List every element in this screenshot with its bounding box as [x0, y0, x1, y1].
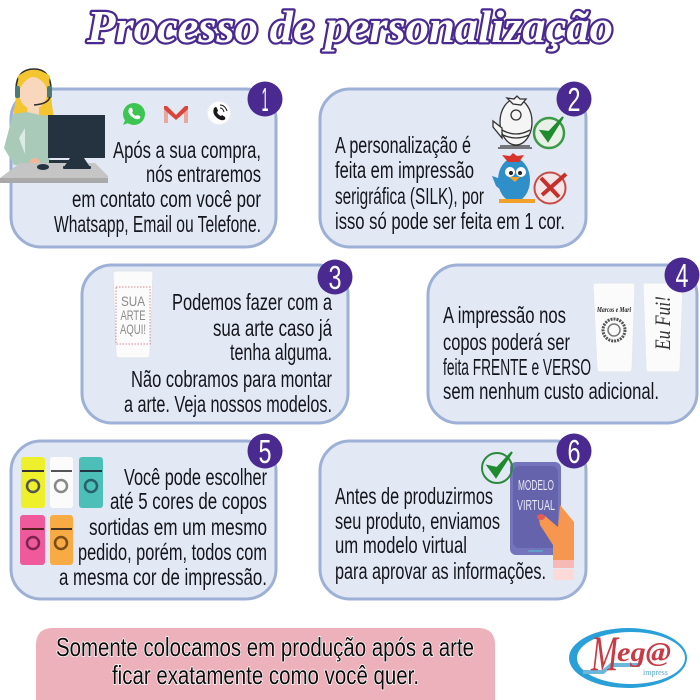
text: step 4: feita FRENTE e VERSO	[443, 354, 591, 380]
text: step 5: sortidas em um mesmo	[89, 514, 267, 540]
number badge 1	[248, 81, 282, 118]
icon: whatsapp	[123, 103, 145, 125]
icon: green check	[534, 117, 564, 148]
number badge 6: 6	[568, 433, 580, 470]
text: step 3: tenha alguma.	[230, 339, 332, 365]
text: step 5: Você pode escolher	[124, 464, 267, 490]
icon: hand	[537, 505, 574, 580]
number badge 1: 1	[262, 81, 268, 118]
panel: final note: Somente colocamos em produção após a arte	[56, 632, 474, 662]
text: step 5: até 5 cores de copos	[110, 488, 267, 514]
text: step 5	[59, 464, 267, 590]
image: cup back	[643, 283, 683, 372]
text: step 1: Whatsapp, Email ou Telefone.	[54, 211, 261, 237]
image: cup with art placeholder: AQUI!	[120, 321, 146, 337]
panel: step 2	[320, 81, 592, 247]
text: step 2: serigráfica (SILK), por	[335, 183, 484, 209]
text: step 1: nós entraremos	[146, 161, 261, 187]
text: step 1: em contato com você por	[72, 186, 261, 212]
panel: step 4	[428, 257, 700, 423]
logo: Mega Impress	[569, 625, 687, 688]
number badge 6	[556, 433, 592, 470]
image: cup with art placeholder: SUA	[121, 293, 146, 309]
logo: Mega Impress: M	[590, 625, 620, 681]
number badge 4	[664, 257, 700, 294]
text: step 3: a arte. Veja nossos modelos.	[124, 391, 332, 417]
icon: phone with virtual model: MODELO	[518, 477, 554, 494]
text: step 2: isso só pode ser feita em 1 cor.	[335, 208, 565, 234]
text: step 3: Não cobramos para montar	[131, 366, 332, 392]
text: step 4: A impressão nos	[443, 302, 566, 328]
number badge 3	[318, 259, 352, 296]
panel: final note	[36, 628, 495, 700]
text: step 2: feita em impressão	[335, 157, 474, 183]
text: step 2: A personalização é	[335, 132, 471, 158]
text: step 1: Após a sua compra,	[113, 137, 261, 163]
icon: outlined chick	[493, 96, 532, 148]
title: Processo de personalização	[86, 1, 613, 52]
text: step 6: Antes de produzirmos	[335, 483, 493, 509]
cup: white	[50, 457, 73, 508]
image: cup front: Marcos e Mari	[596, 306, 631, 314]
cup: teal	[79, 457, 103, 508]
number badge 2: 2	[568, 81, 580, 118]
number badge 2	[556, 81, 592, 118]
cup: yellow	[21, 457, 45, 508]
text: step 3: Podemos fazer com a	[172, 289, 332, 315]
text: step 5: pedido, porém, todos com	[78, 539, 267, 565]
panel: final note: ficar exatamente como você quer.	[112, 660, 419, 690]
icon: blue chick	[492, 153, 535, 203]
text: step 6: seu produto, enviamos	[335, 508, 500, 534]
icon: phone with virtual model	[510, 462, 561, 555]
text: step 4: copos poderá ser	[443, 329, 570, 355]
text: step 1	[54, 137, 261, 237]
logo: Mega Impress: impress	[643, 668, 668, 677]
icon: attendant at computer	[0, 69, 108, 183]
image: cup front	[593, 283, 635, 372]
cup: orange	[50, 515, 73, 565]
panel: step 5	[11, 433, 282, 599]
number badge 5	[248, 433, 282, 470]
number badge 4: 4	[676, 257, 688, 294]
panel: step 3	[82, 259, 352, 423]
image: cup with art placeholder	[113, 271, 153, 358]
text: step 3	[124, 289, 332, 417]
icon: gmail	[164, 106, 188, 123]
icon: red cross	[534, 172, 566, 204]
text: step 3: sua arte caso já	[213, 315, 332, 341]
panel: step 6	[320, 433, 592, 599]
icon: phone with virtual model: VIRTUAL	[517, 497, 555, 514]
text: step 6	[335, 483, 546, 584]
panel: step 1	[0, 69, 282, 247]
icon: telephone	[208, 102, 230, 124]
image: cup with art placeholder: ARTE	[120, 307, 146, 323]
cup: pink	[20, 515, 45, 565]
logo: Mega Impress: eg@	[617, 637, 671, 667]
image: coloured cups	[20, 457, 103, 565]
text: step 6: um modelo virtual	[335, 532, 467, 558]
text: step 2	[335, 132, 565, 234]
text: step 4	[443, 302, 659, 404]
image: cup back: Eu Fui!	[650, 296, 675, 351]
text: step 5: a mesma cor de impressão.	[59, 564, 267, 590]
number badge 3: 3	[328, 259, 342, 296]
text: step 6: para aprovar as informações.	[335, 558, 546, 584]
number badge 5: 5	[258, 433, 272, 470]
icon: green check	[482, 452, 512, 483]
